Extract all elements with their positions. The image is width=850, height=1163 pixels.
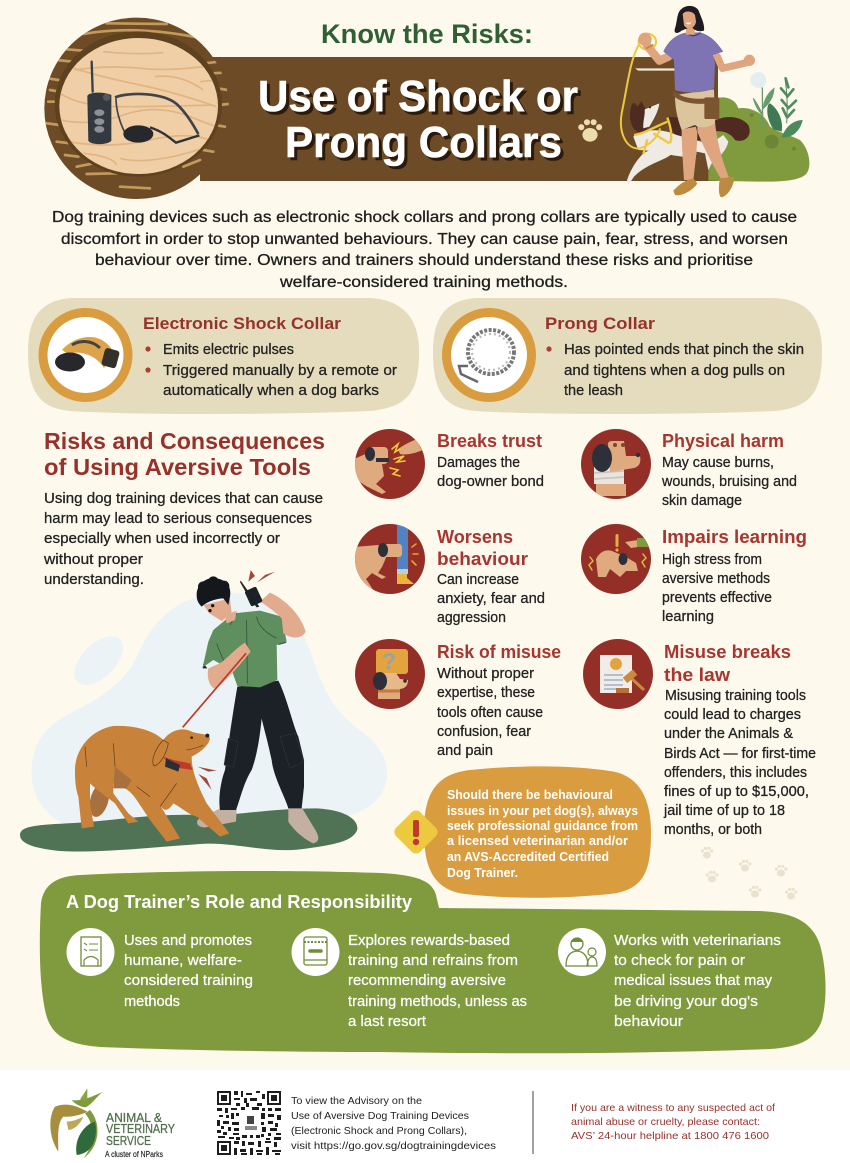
illustration: woman walking dog with bush bbox=[621, 6, 809, 197]
text: helpline: AVS’ 24-hour helpline at 1800 476 1600 bbox=[571, 1130, 769, 1142]
description bbox=[662, 551, 772, 625]
text: considered training bbox=[124, 972, 253, 989]
icon: cowering dog bbox=[581, 524, 652, 594]
description: dog-owner bond bbox=[437, 473, 544, 490]
text: Works with veterinarians bbox=[614, 932, 781, 949]
footer background bbox=[0, 1070, 850, 1163]
heading bbox=[664, 642, 791, 685]
icon: vet with dog bbox=[558, 928, 606, 976]
text: be driving your dog's bbox=[614, 993, 758, 1010]
panel: dog trainer's role bbox=[40, 871, 826, 1053]
bullet list: Triggered manually by a remote or bbox=[163, 362, 397, 379]
heading: risks and consequences bbox=[44, 428, 325, 480]
description: learning bbox=[662, 608, 714, 625]
description: and pain bbox=[437, 742, 493, 759]
heading: Misuse breaks bbox=[664, 642, 791, 662]
text: training methods, unless as bbox=[348, 993, 527, 1010]
heading: Risk of misuse bbox=[437, 642, 561, 662]
logo: Animal & Veterinary Service: VETERINARY bbox=[106, 1122, 176, 1136]
icon: checklist bbox=[66, 928, 114, 976]
text: advisory link: (Electronic Shock and Prong Collars), bbox=[291, 1125, 467, 1137]
text: advisory link bbox=[291, 1095, 496, 1152]
bullet list bbox=[546, 341, 804, 399]
description: tools often cause bbox=[437, 704, 543, 721]
icon: dog biting leg bbox=[354, 523, 425, 594]
description: Can increase bbox=[437, 571, 519, 588]
text: a last resort bbox=[348, 1013, 427, 1030]
text: helpline bbox=[571, 1102, 775, 1142]
bullet list: and tightens when a dog pulls on bbox=[564, 362, 785, 379]
text: behaviour bbox=[614, 1013, 683, 1030]
description bbox=[437, 571, 545, 626]
text: training and refrains from bbox=[348, 952, 518, 969]
heading: Worsens bbox=[437, 527, 513, 547]
heading: prong collar: Prong Collar bbox=[545, 314, 655, 333]
description: aggression bbox=[437, 609, 506, 626]
icon: confused dog: ? bbox=[382, 648, 396, 674]
text: Uses and promotes bbox=[124, 932, 252, 949]
text: advisory link: visit https://go.gov.sg/dogtrainingdevices bbox=[291, 1140, 496, 1152]
description bbox=[437, 454, 544, 490]
intro paragraph: discomfort in order to stop unwanted behaviours. They can cause pain, fear, stress, and worsen bbox=[61, 231, 788, 248]
bullet list: automatically when a dog barks bbox=[163, 382, 379, 399]
text: to check for pain or bbox=[614, 952, 745, 969]
risk: worsens behaviour bbox=[354, 523, 545, 626]
icon: treat bag bbox=[292, 928, 340, 976]
callout: seek professional guidance: Should there be behavioural bbox=[447, 788, 613, 802]
heading bbox=[437, 527, 528, 569]
heading: electronic shock collar: Electronic Shock Collar bbox=[143, 314, 341, 333]
description: anxiety, fear and bbox=[437, 590, 545, 607]
icon: dog biting bbox=[354, 429, 426, 499]
description: High stress from bbox=[662, 551, 762, 568]
callout: seek professional guidance: issues in your pet dog(s), always bbox=[447, 804, 638, 818]
icon: shock collar photo bbox=[38, 308, 132, 402]
heading: Use of Shock or Prong Collars: Prong Collars bbox=[285, 118, 562, 167]
risk: misuse breaks the law bbox=[583, 639, 816, 838]
text: methods bbox=[124, 993, 180, 1010]
description: confusion, fear bbox=[437, 723, 531, 740]
icon: legal document and gavel bbox=[583, 639, 653, 709]
description: aversive methods bbox=[662, 570, 770, 587]
text bbox=[124, 932, 253, 1010]
text: humane, welfare- bbox=[124, 952, 242, 969]
risk: breaks trust bbox=[354, 429, 544, 499]
heading: A Dog Trainer’s Role and Responsibility bbox=[66, 892, 412, 912]
description: Misusing training tools bbox=[665, 687, 806, 704]
callout: seek professional guidance: an AVS-Accredited Certified bbox=[447, 850, 609, 864]
description: jail time of up to 18 bbox=[663, 802, 785, 819]
text: risks intro: harm may lead to serious consequences bbox=[44, 510, 312, 527]
heading: Impairs learning bbox=[662, 527, 807, 547]
logo: Animal & Veterinary Service: SERVICE bbox=[106, 1134, 151, 1148]
heading: Use of Shock or Prong Collars bbox=[258, 72, 578, 167]
bullet list bbox=[145, 341, 397, 399]
description: Birds Act — for first-time bbox=[664, 745, 816, 762]
title: Know the Risks: Know the Risks: bbox=[321, 19, 533, 49]
decoration: paw prints bbox=[701, 847, 797, 900]
callout: seek professional guidance: a licensed veterinarian and/or bbox=[447, 834, 628, 848]
text: helpline: If you are a witness to any suspected act of bbox=[571, 1102, 775, 1114]
icon: confused dog bbox=[355, 639, 425, 709]
heading: risks and consequences: of Using Aversive Tools bbox=[44, 454, 311, 480]
text: risks intro: Using dog training devices that can cause bbox=[44, 490, 323, 507]
description: May cause burns, bbox=[662, 454, 774, 471]
logo: Animal & Veterinary Service: ANIMAL & bbox=[106, 1111, 163, 1125]
description: months, or both bbox=[664, 821, 762, 838]
heading: risks and consequences: Risks and Consequences bbox=[44, 428, 325, 454]
text: recommending aversive bbox=[348, 972, 506, 989]
text: risks intro: understanding. bbox=[44, 571, 144, 588]
item: works with veterinarians bbox=[558, 928, 781, 1030]
callout: seek professional guidance: Dog Trainer. bbox=[447, 866, 518, 880]
panel: electronic shock collar bbox=[28, 298, 419, 414]
icon: warning diamond bbox=[392, 808, 440, 856]
intro paragraph bbox=[52, 209, 797, 291]
text: helpline: animal abuse or cruelty, please contact: bbox=[571, 1116, 760, 1128]
description: Without proper bbox=[437, 665, 534, 682]
panel: prong collar bbox=[433, 298, 822, 414]
heading: behaviour bbox=[437, 549, 528, 569]
bullet list: Has pointed ends that pinch the skin bbox=[564, 341, 804, 358]
callout: seek professional guidance bbox=[392, 766, 651, 898]
bullet list: Emits electric pulses bbox=[163, 341, 294, 358]
item: rewards-based training bbox=[292, 928, 527, 1030]
item: humane methods bbox=[66, 928, 253, 1010]
text bbox=[614, 932, 781, 1030]
description: prevents effective bbox=[662, 589, 772, 606]
illustration: man shocking dog bbox=[20, 570, 387, 851]
heading: Use of Shock or Prong Collars: Use of Shock or bbox=[258, 72, 578, 121]
heading: the law bbox=[664, 665, 731, 685]
description: skin damage bbox=[662, 492, 742, 509]
risk: risk of misuse bbox=[355, 639, 561, 759]
text: medical issues that may bbox=[614, 972, 772, 989]
description: wounds, bruising and bbox=[661, 473, 797, 490]
icon: paw on banner bbox=[578, 119, 602, 142]
description bbox=[661, 454, 797, 509]
intro paragraph: Dog training devices such as electronic shock collars and prong collars are typically used to cause bbox=[52, 209, 797, 226]
text: risks intro: especially when used incorrectly or bbox=[44, 530, 280, 547]
description: Damages the bbox=[437, 454, 520, 471]
description: offenders, this includes bbox=[664, 764, 807, 781]
description bbox=[663, 687, 816, 838]
text: advisory link: To view the Advisory on the bbox=[291, 1095, 422, 1107]
text: Explores rewards-based bbox=[348, 932, 510, 949]
description: could lead to charges bbox=[664, 706, 801, 723]
intro paragraph: behaviour over time. Owners and trainers should understand these risks and prioritise bbox=[95, 252, 753, 269]
logo: Animal & Veterinary Service bbox=[50, 1088, 176, 1159]
logo: Animal & Veterinary Service: A cluster of NParks bbox=[105, 1150, 163, 1159]
callout: seek professional guidance: seek professional guidance from bbox=[447, 819, 638, 833]
description: expertise, these bbox=[437, 684, 535, 701]
QR code bbox=[217, 1091, 281, 1155]
icon: injured dog bbox=[581, 429, 651, 499]
description bbox=[437, 665, 543, 759]
text: risks intro: without proper bbox=[43, 551, 143, 568]
intro paragraph: welfare-considered training methods. bbox=[279, 274, 568, 291]
icon: prong collar photo bbox=[442, 308, 536, 402]
text: risks intro bbox=[43, 490, 323, 588]
icon: wooden circle with shock collar bbox=[44, 18, 229, 199]
text bbox=[348, 932, 527, 1030]
risk: physical harm bbox=[581, 429, 797, 509]
risk: impairs learning bbox=[581, 524, 807, 625]
bullet list: the leash bbox=[564, 382, 623, 399]
banner: wooden plank bbox=[200, 57, 718, 181]
text: advisory link: Use of Aversive Dog Training Devices bbox=[291, 1110, 469, 1122]
heading: Physical harm bbox=[662, 431, 784, 451]
description: fines of up to $15,000, bbox=[664, 783, 809, 800]
description: under the Animals & bbox=[664, 725, 793, 742]
heading: Breaks trust bbox=[437, 431, 542, 451]
